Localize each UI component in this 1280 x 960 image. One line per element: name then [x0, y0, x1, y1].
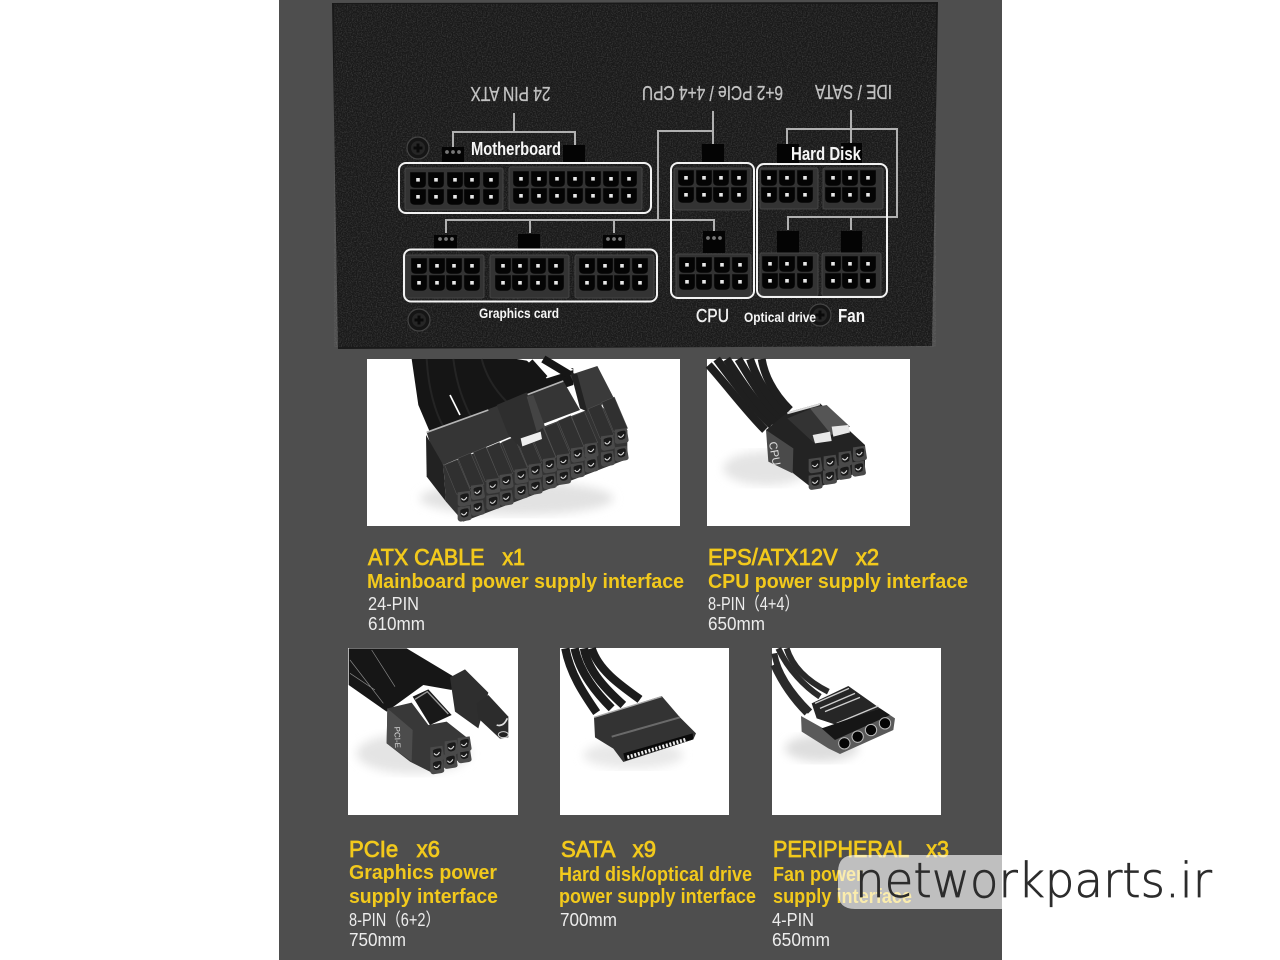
text block: Peripheral: supply interface [773, 886, 912, 908]
panel: power supply connector plate [332, 2, 938, 349]
text block: EPS ATX12V: EPS/ATX12V x2 [708, 544, 879, 570]
photo: EPS ATX12V cable [707, 359, 910, 526]
photo: PCIe cable: PCI-E [392, 727, 402, 748]
socket: hard disk [761, 170, 876, 203]
photo: ATX 24-pin cable [367, 359, 680, 526]
text block: ATX cable [367, 544, 684, 634]
text block: SATA: SATA x9 [561, 836, 656, 862]
label: Fan: Fan [838, 306, 865, 326]
text block: Peripheral: 650mm [772, 930, 830, 950]
text block: PCIe: 8-PIN（6+2） [349, 910, 440, 930]
text block: Peripheral: Fan power [773, 864, 863, 886]
text block: SATA [559, 836, 756, 930]
photo: SATA cable [560, 648, 729, 815]
text block: EPS ATX12V: CPU power supply interface [708, 571, 968, 593]
text block: PCIe: PCIe x6 [349, 836, 440, 862]
text block: ATX cable: ATX CABLE x1 [368, 544, 525, 570]
socket: optical drive and fan [762, 256, 876, 289]
text block: ATX cable: Mainboard power supply interface [367, 571, 684, 593]
upside-down label: 6+2 PCIe / 4+4 CPU: 6+2 PCIe / 4+4 CPU [642, 81, 783, 103]
text block: PCIe [349, 836, 498, 950]
socket: CPU upper [678, 170, 747, 203]
socket: graphics card [411, 258, 648, 291]
text block: EPS ATX12V: 650mm [708, 614, 765, 634]
watermark: networkparts.ir: networkparts.ir [855, 853, 1212, 909]
text block: Peripheral: PERIPHERAL x3 [773, 836, 949, 862]
text block: SATA: Hard disk/optical drive [559, 864, 752, 886]
label: CPU: CPU [696, 306, 729, 326]
label: Optical drive: Optical drive [744, 309, 816, 325]
photo: PCIe cable [348, 648, 518, 815]
label: Motherboard: Motherboard [471, 139, 561, 159]
watermark backdrop [838, 855, 1002, 909]
text block: ATX cable: 610mm [368, 614, 425, 634]
connection lines [446, 110, 897, 233]
text block: PCIe: Graphics power [349, 862, 497, 884]
text block: Peripheral [772, 836, 949, 950]
connector sockets housing [405, 167, 883, 298]
label: Graphics card: Graphics card [479, 305, 559, 321]
upside-down label: 24 PIN ATX: 24 PIN ATX [470, 82, 550, 104]
text block: ATX cable: 24-PIN [368, 594, 419, 614]
text block: PCIe: supply interface [349, 886, 498, 908]
text block: SATA: power supply interface [559, 886, 756, 908]
text block: EPS ATX12V [708, 544, 968, 634]
connector clips [434, 143, 862, 253]
text block: SATA: 700mm [560, 910, 617, 930]
photo: EPS ATX12V cable: CPU [766, 441, 782, 466]
text block: Peripheral: 4-PIN [772, 910, 814, 930]
label: Hard Disk: Hard Disk [791, 144, 862, 164]
socket: CPU lower [679, 257, 748, 290]
socket: 24 pin motherboard [410, 171, 637, 205]
upside-down label: IDE / SATA: IDE / SATA [814, 80, 892, 102]
central grey panel [279, 0, 1002, 960]
text block: EPS ATX12V: 8-PIN（4+4） [708, 594, 799, 614]
white outline boxes [399, 163, 887, 302]
photo: peripheral molex cable [772, 648, 941, 815]
text block: PCIe: 750mm [349, 930, 406, 950]
screws [407, 137, 831, 331]
